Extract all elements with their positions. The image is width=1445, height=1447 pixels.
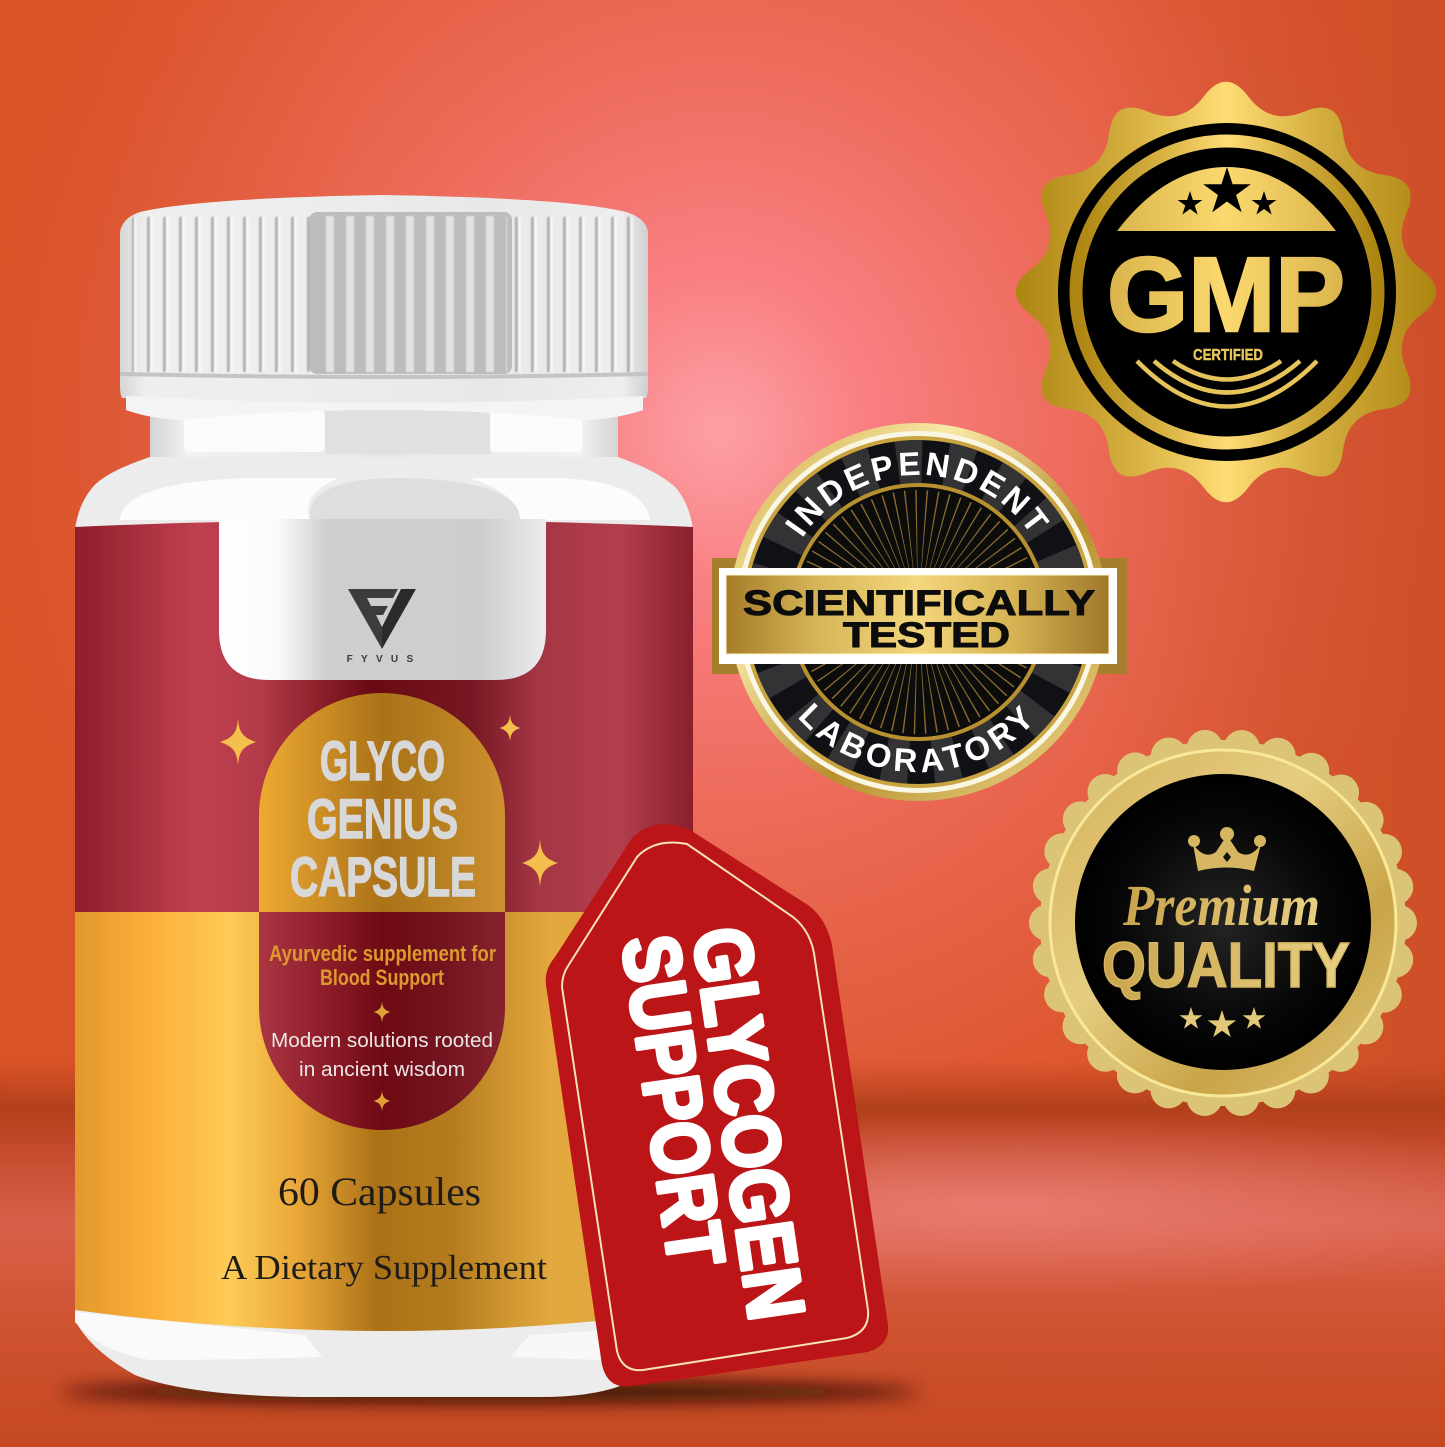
bottle cap bbox=[120, 195, 648, 420]
product subtitle: Ayurvedic supplement for bbox=[269, 941, 496, 966]
banner bbox=[719, 568, 1117, 664]
dietary supplement line: A Dietary Supplement bbox=[221, 1248, 547, 1287]
rating stars bbox=[1180, 1007, 1265, 1037]
outer ring bbox=[729, 423, 1107, 801]
top gold segment bbox=[1117, 167, 1336, 231]
product pill panel bbox=[259, 693, 505, 1130]
label: red upper band bbox=[75, 520, 693, 912]
laboratory text: LABORATORY bbox=[798, 702, 1030, 772]
crown icon bbox=[1188, 827, 1266, 871]
bright line ring bbox=[1050, 750, 1396, 1096]
tag text: GLYCOGEN bbox=[676, 922, 821, 1325]
bottle body bbox=[75, 457, 693, 1397]
badge: premium quality bbox=[1040, 740, 1406, 1106]
supplement bottle bbox=[75, 195, 693, 1397]
tag text: SUPPORT bbox=[605, 930, 741, 1272]
premium text: Premium bbox=[1122, 873, 1320, 938]
black disc bbox=[1058, 123, 1396, 461]
black disc bbox=[1075, 774, 1371, 1070]
product name bbox=[290, 729, 476, 908]
product name: CAPSULE bbox=[290, 845, 476, 908]
product subtitle: Blood Support bbox=[320, 965, 445, 990]
product name: GENIUS bbox=[307, 787, 458, 850]
certified text: CERTIFIED bbox=[1193, 347, 1263, 364]
white ring bbox=[737, 431, 1099, 793]
checker segments bbox=[768, 462, 1068, 762]
bottle neck bbox=[150, 400, 618, 470]
badge: scientifically tested bbox=[712, 423, 1127, 801]
sunburst bbox=[838, 532, 998, 692]
label: gold lower band bbox=[75, 912, 693, 1331]
gold ring bbox=[1076, 141, 1378, 443]
label window bbox=[219, 519, 546, 680]
banner: TESTED bbox=[843, 616, 1010, 655]
GMP text: GMP bbox=[1107, 236, 1345, 354]
banner tabs bbox=[712, 558, 1127, 674]
quality text: QUALITY bbox=[1102, 929, 1350, 1001]
gold inner ring bbox=[742, 436, 1094, 788]
gold seal bbox=[1016, 82, 1436, 502]
product subtitle bbox=[269, 941, 496, 990]
black ring bbox=[746, 440, 1090, 784]
sparkles bbox=[220, 714, 558, 1112]
brand logo: FYVUS: FYVUS bbox=[347, 654, 421, 665]
badge: GMP certified bbox=[1016, 82, 1436, 502]
scalloped gold seal bbox=[1040, 740, 1406, 1106]
tagline: Modern solutions rooted bbox=[271, 1030, 493, 1052]
floor shadow bbox=[60, 1382, 920, 1402]
stars bbox=[1178, 167, 1276, 215]
tag text bbox=[605, 922, 821, 1325]
brand logo: FYVUS bbox=[347, 589, 421, 665]
capsule count: 60 Capsules bbox=[278, 1169, 481, 1214]
inner gold ring bbox=[791, 485, 1045, 739]
arcs bbox=[1137, 361, 1317, 406]
tagline bbox=[271, 1030, 493, 1081]
banner: SCIENTIFICALLY bbox=[743, 584, 1095, 623]
tag: glycogen support bbox=[546, 824, 888, 1387]
tagline: in ancient wisdom bbox=[299, 1059, 465, 1081]
independent text: INDEPENDENT bbox=[785, 452, 1050, 537]
product name: GLYCO bbox=[320, 729, 445, 792]
